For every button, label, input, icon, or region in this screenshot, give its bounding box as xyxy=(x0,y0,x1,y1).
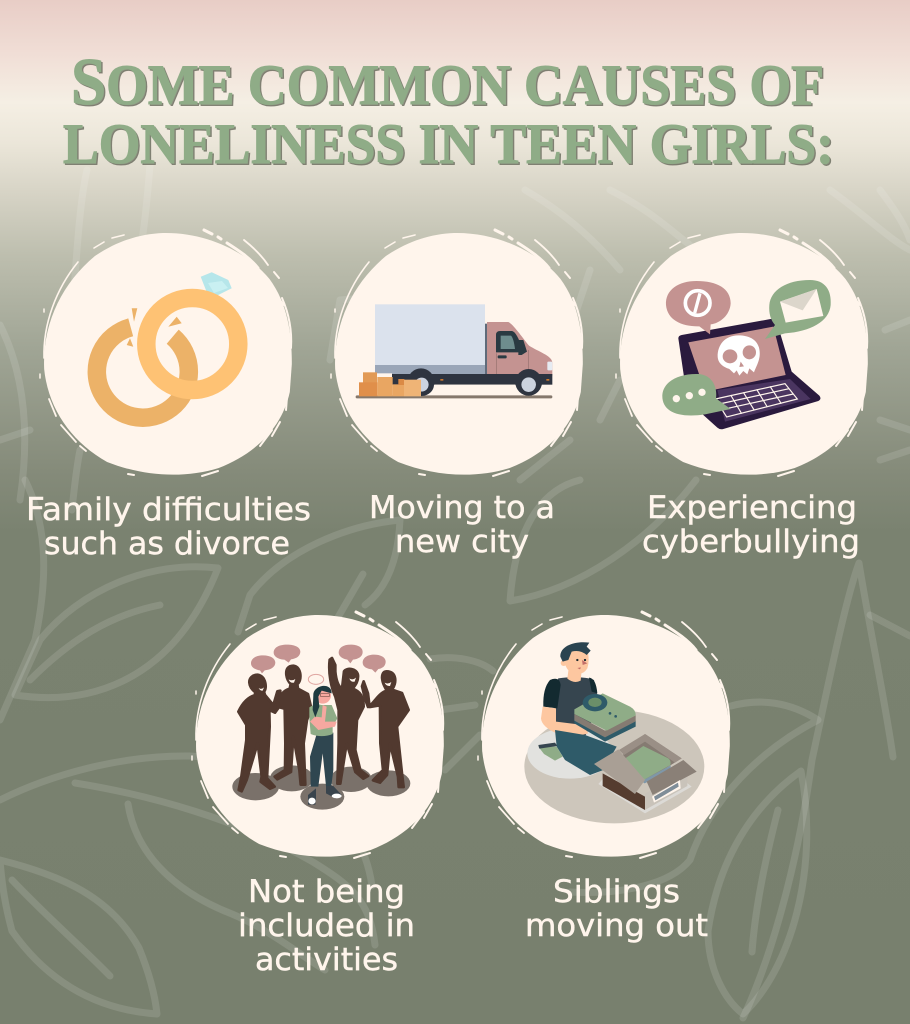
icon: moving truck with boxes xyxy=(356,304,552,398)
label: moving to a new city: Moving to a xyxy=(369,490,555,526)
label: moving to a new city: new city xyxy=(395,524,529,560)
icon: laptop with skull and chat bubbles xyxy=(662,280,831,429)
panel: moving to a new city xyxy=(331,230,583,560)
girl xyxy=(308,674,324,684)
icon: person packing clothes into a box xyxy=(524,642,704,823)
title xyxy=(63,45,836,178)
label: family difficulties: such as divorce xyxy=(44,526,290,562)
label: siblings moving out: Siblings xyxy=(553,874,680,910)
folded shirts xyxy=(574,717,636,742)
title shadow xyxy=(64,46,836,178)
title text: SOME COMMON CAUSES OF xyxy=(71,45,824,119)
brushed circle xyxy=(478,612,730,858)
label: experiencing cyberbullying: Experiencing xyxy=(647,490,857,526)
bubble: prohibited xyxy=(666,281,731,334)
head xyxy=(567,668,582,682)
panel: family difficulties xyxy=(26,230,311,562)
icon: group excluding a girl xyxy=(232,645,410,810)
label: not being included in activities xyxy=(238,874,415,978)
brushed circle xyxy=(192,612,444,858)
brushed circle xyxy=(616,230,868,476)
title text: LONELINESS IN TEEN GIRLS: xyxy=(63,113,834,176)
panel: not being included xyxy=(192,612,444,978)
person xyxy=(550,677,597,737)
boxes xyxy=(363,372,377,384)
brushed circle xyxy=(331,230,583,476)
brushed circle xyxy=(40,230,292,476)
skull xyxy=(718,335,760,376)
panel: experiencing cyberbullying xyxy=(616,230,868,560)
label: family difficulties: Family difficulties xyxy=(26,492,311,528)
label: moving to a new city xyxy=(369,490,555,560)
label: siblings moving out xyxy=(525,874,708,944)
label: family difficulties xyxy=(26,492,311,562)
box xyxy=(598,778,692,813)
speech bubbles xyxy=(251,645,386,673)
faces xyxy=(259,678,391,691)
icon: broken wedding rings xyxy=(97,272,238,418)
title shadow: SOME COMMON CAUSES OF xyxy=(72,46,825,120)
label: experiencing cyberbullying: cyberbullying xyxy=(642,524,860,560)
label: not being included in activities: Not being xyxy=(248,874,405,910)
title text xyxy=(63,45,834,176)
label: siblings moving out: moving out xyxy=(525,908,708,944)
label: experiencing cyberbullying xyxy=(642,490,860,560)
bubble: typing xyxy=(662,374,731,415)
bubble: envelope xyxy=(765,280,831,339)
label: not being included in activities: activities xyxy=(255,942,398,978)
title shadow: LONELINESS IN TEEN GIRLS: xyxy=(64,114,836,178)
panel: siblings moving out xyxy=(478,612,730,944)
silhouettes xyxy=(238,658,409,791)
label: not being included in activities: included in xyxy=(238,908,415,944)
